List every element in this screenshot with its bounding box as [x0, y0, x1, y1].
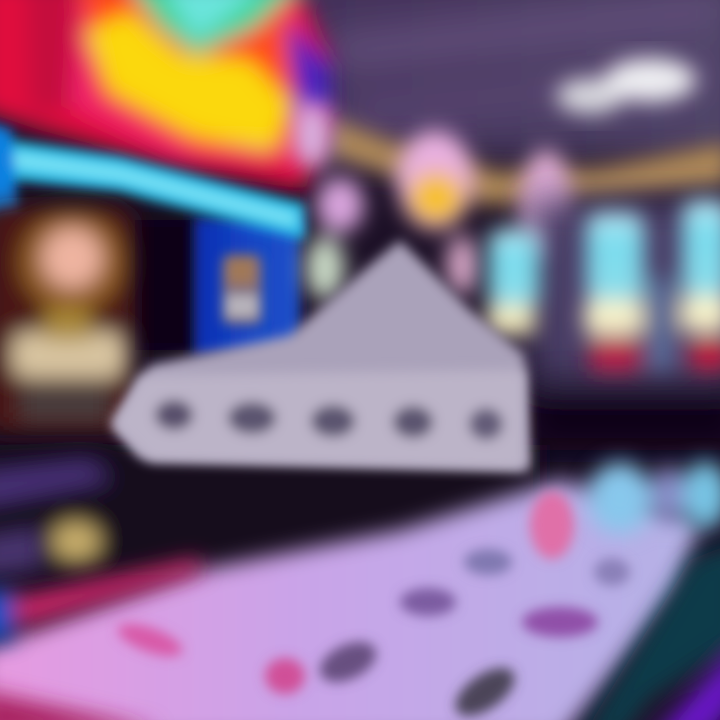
rainbow sign [0, 0, 330, 190]
orange ceiling beam [330, 118, 720, 205]
lower right corner [580, 540, 720, 720]
left arcade figure [0, 205, 135, 435]
floor edge glow [0, 558, 200, 720]
lower left dark counter [0, 445, 540, 575]
pink floor [0, 480, 700, 720]
neon cyan strip [0, 120, 305, 240]
small blue panel figure [222, 255, 262, 325]
right reflections [588, 461, 720, 534]
right cabinets dark backdrop [525, 200, 720, 450]
ceiling light [556, 58, 696, 114]
ceiling [270, 0, 720, 160]
stage front with dots [112, 370, 525, 470]
blue panel [194, 218, 300, 356]
mid lanterns [292, 101, 572, 300]
stage stepped top [112, 240, 530, 470]
dark doorway [0, 190, 300, 450]
floor spots [114, 491, 630, 720]
right cabinets [486, 200, 720, 372]
